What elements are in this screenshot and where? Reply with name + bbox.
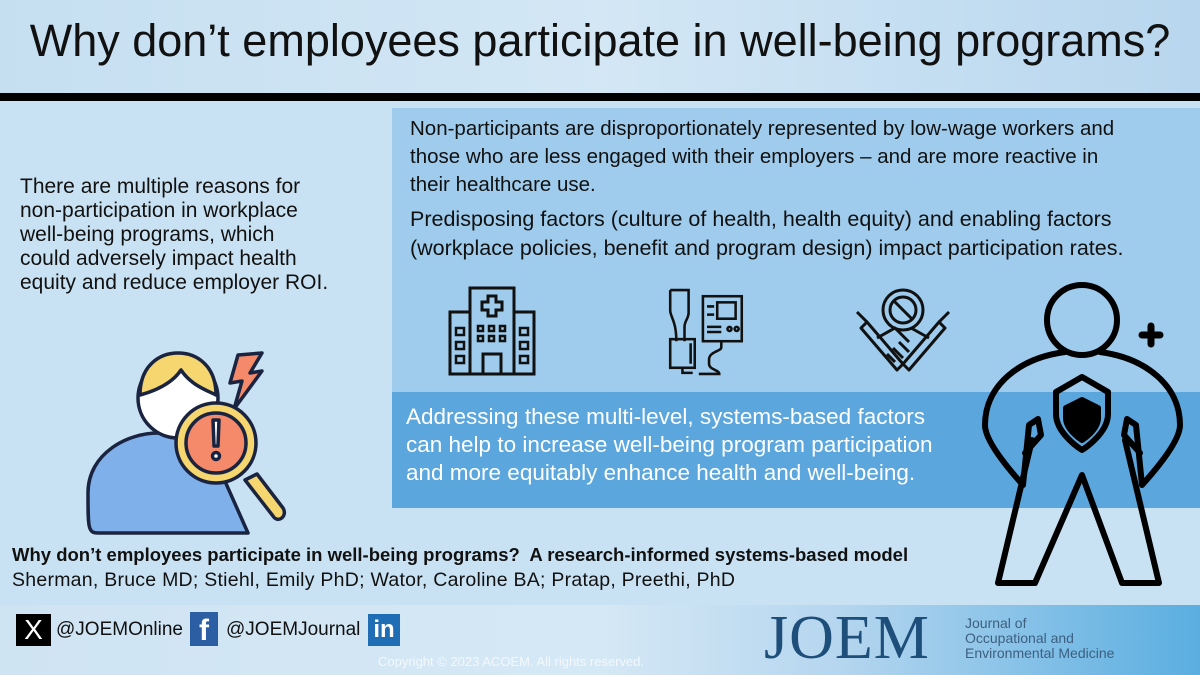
findings text: their healthcare use. Predisposing factors (culture of health, health equity) and enabling factors [410,173,1112,231]
logo: JOEM: Occupational and [965,630,1074,646]
icon: handshake prohibited [856,288,950,372]
social handles: @JOEMOnline [56,619,183,640]
icon: person with warning magnifier [86,351,286,535]
social handles: @JOEMJournal [226,619,360,640]
social handles [16,612,400,647]
callout: conclusion: and more equitably enhance health and well-being. [406,460,915,485]
citation [12,544,908,591]
social handles: X [24,614,43,645]
panel: findings [392,108,1200,392]
icon: hospital [448,286,536,376]
icon: person with shield [982,282,1183,586]
logo: JOEM: Journal of [965,615,1026,631]
copyright: Copyright © 2023 ACOEM. All rights reserved. [378,654,644,669]
findings text: those who are less engaged with their employers – and are more reactive in [410,145,1098,168]
social handles: f [199,614,209,647]
logo: JOEM [764,604,1114,672]
findings text [410,117,1123,260]
left intro text [20,175,328,294]
logo: JOEM: JOEM [764,604,930,672]
citation: Why don’t employees participate in well-being programs? A research-informed systems-based model [12,544,908,565]
title: Why don’t employees participate in well-being programs? [30,15,1170,66]
left intro text: non-participation in workplace [20,199,298,222]
findings text: Non-participants are disproportionately represented by low-wage workers and [410,117,1114,140]
callout: conclusion: Addressing these multi-level, systems-based factors [406,404,925,429]
logo: JOEM: Environmental Medicine [965,645,1114,661]
findings text: (workplace policies, benefit and program design) impact participation rates. [410,236,1123,260]
social handles: in [373,616,395,643]
left intro text: could adversely impact health [20,247,297,270]
citation: Sherman, Bruce MD; Stiehl, Emily PhD; Wator, Caroline BA; Pratap, Preethi, PhD [12,569,735,591]
left intro text: well-being programs, which [20,223,274,246]
title band [0,0,1200,93]
icon: blood pressure monitor [668,288,744,376]
footer band [0,605,1200,675]
left intro text: equity and reduce employer ROI. [20,271,328,294]
callout: conclusion: can help to increase well-being program participation [406,432,933,457]
callout: conclusion [392,392,1200,508]
left intro text: There are multiple reasons for [20,175,300,198]
